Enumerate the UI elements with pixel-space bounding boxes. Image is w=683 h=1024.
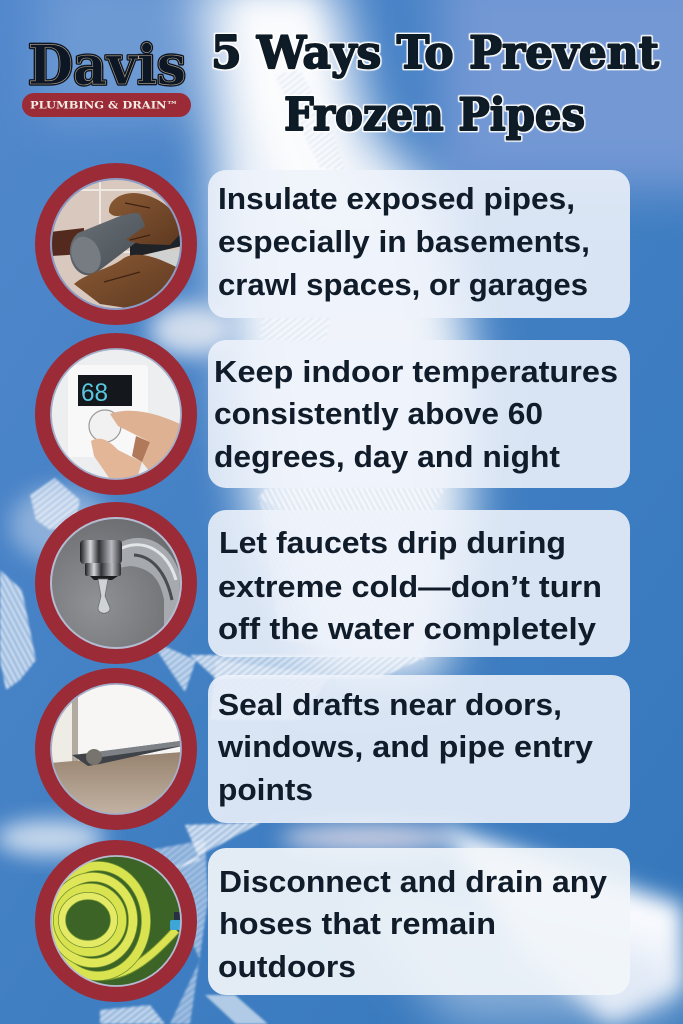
icon: dripping chrome faucet	[43, 510, 189, 656]
ice crystal ferns	[0, 70, 446, 1024]
panel: seal drafts: points	[218, 772, 313, 807]
panel: insulate exposed pipes: crawl spaces, or garages	[218, 267, 588, 302]
icon: thermostat showing 68	[43, 341, 189, 487]
panel: keep indoor temperatures: degrees, day and night	[214, 439, 560, 474]
panel: keep indoor temperatures: Keep indoor temperatures	[214, 354, 618, 389]
panel: insulate exposed pipes	[208, 170, 630, 318]
icon: door draft stopper	[43, 676, 189, 822]
icon: thermostat showing 68: 68	[81, 379, 108, 407]
panel: disconnect hoses: Disconnect and drain any	[219, 864, 608, 899]
title: 5 Ways To Prevent	[211, 26, 659, 79]
panel: let faucets drip: Let faucets drip during	[219, 525, 566, 560]
panel: seal drafts: Seal drafts near doors,	[218, 687, 562, 722]
panel: seal drafts: windows, and pipe entry	[217, 729, 594, 764]
panel: keep indoor temperatures	[208, 340, 630, 488]
panel: insulate exposed pipes: especially in basements,	[218, 224, 590, 259]
panel: seal drafts	[208, 675, 630, 823]
logo: Davis Plumbing & Drain: PLUMBING & DRAIN™	[30, 100, 178, 112]
title	[211, 26, 659, 141]
icon: hands wrapping foam pipe insulation	[43, 171, 189, 317]
panel: let faucets drip: off the water completely	[218, 611, 597, 646]
logo: Davis Plumbing & Drain: Davis	[28, 33, 186, 97]
logo: Davis Plumbing & Drain: Davis	[28, 33, 186, 97]
panel: keep indoor temperatures: consistently above 60	[214, 396, 543, 431]
panel: insulate exposed pipes: Insulate exposed pipes,	[218, 181, 575, 216]
panel: let faucets drip: extreme cold—don’t turn	[218, 569, 602, 604]
panel: disconnect hoses	[208, 848, 630, 995]
panel: disconnect hoses: hoses that remain	[219, 906, 496, 941]
panel: let faucets drip	[208, 510, 630, 657]
panel: disconnect hoses: outdoors	[218, 949, 356, 984]
icon: coiled yellow garden hose on grass	[43, 848, 189, 994]
title: Frozen Pipes	[284, 88, 585, 141]
